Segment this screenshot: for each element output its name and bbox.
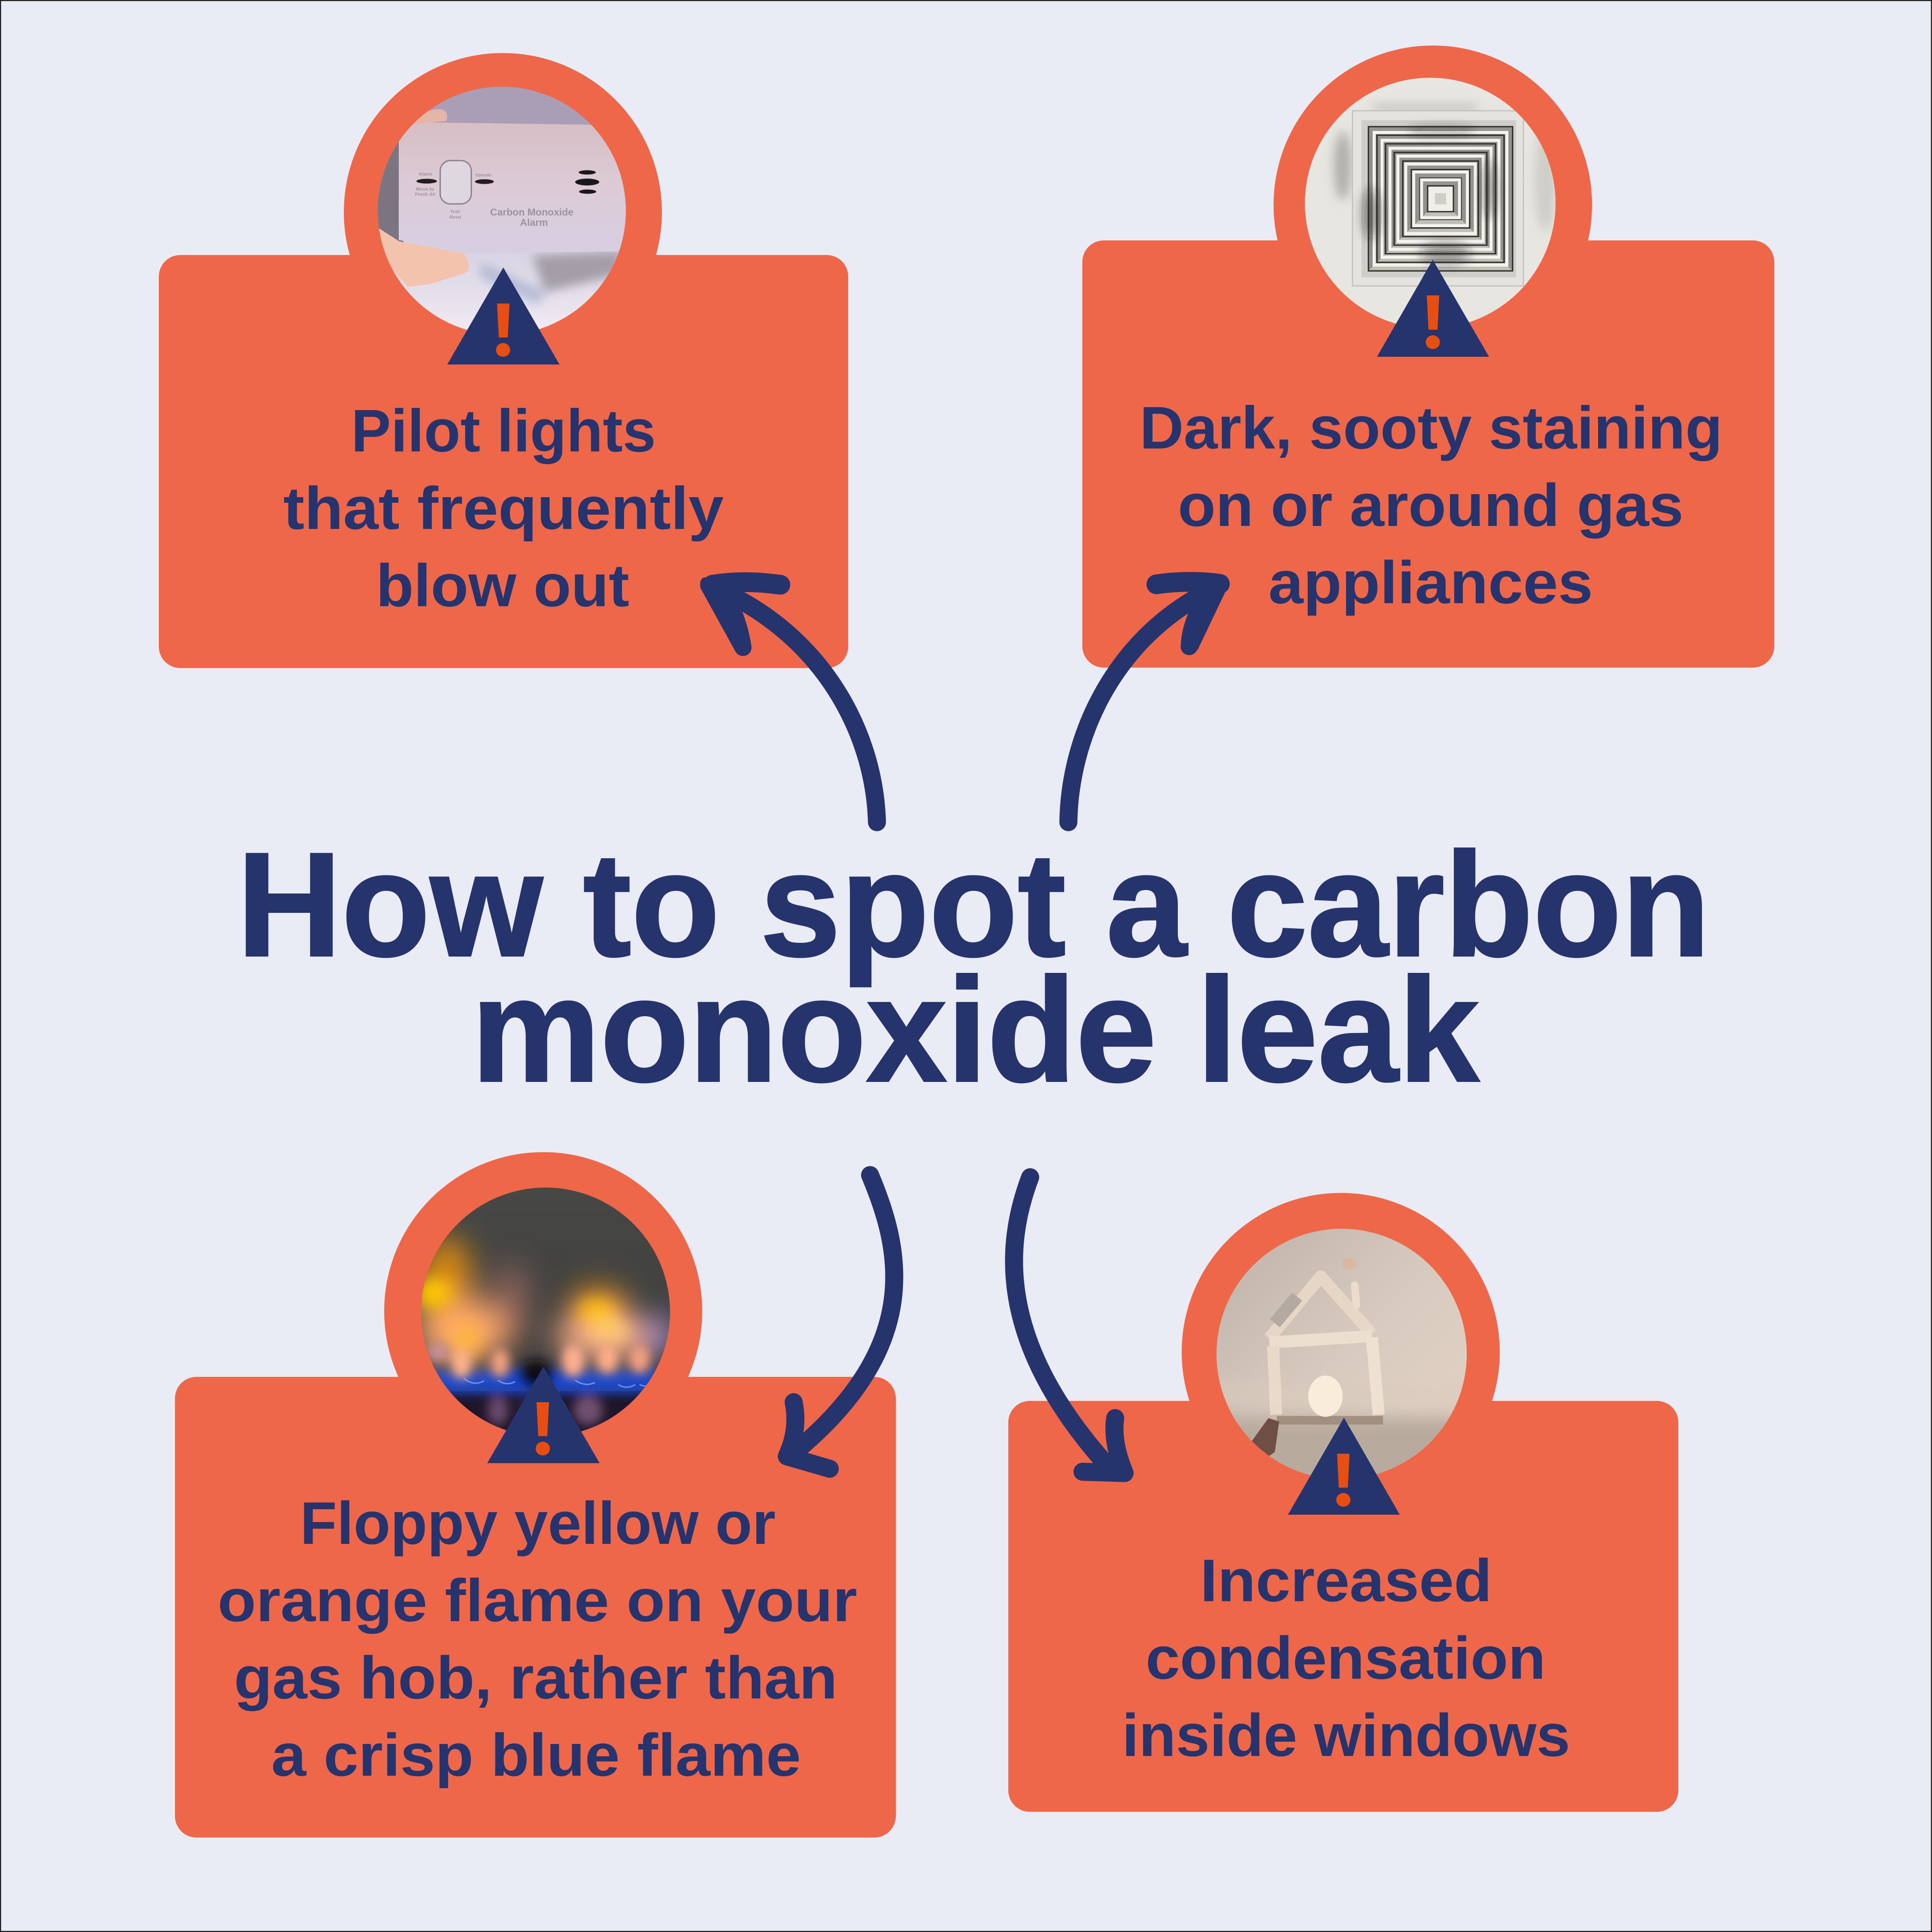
panel: condensation — [1008, 1193, 1678, 1812]
panel: sooty staining — [1083, 46, 1774, 668]
text: sooty staining — [1140, 394, 1723, 616]
photo: carbon monoxide alarm: Operate — [475, 173, 491, 178]
text: floppy flame: a crisp blue flame — [271, 1721, 801, 1789]
text: pilot lights: blow out — [376, 552, 629, 619]
text: floppy flame — [218, 1489, 857, 1789]
arrow: up to sooty staining — [1068, 577, 1229, 822]
title — [237, 822, 1710, 1113]
text: condensation: condensation — [1146, 1624, 1546, 1692]
icon: warning triangle — [1288, 1418, 1400, 1515]
photo: gas hob flame — [416, 1185, 676, 1443]
title: monoxide leak — [471, 948, 1480, 1113]
text: sooty staining: Dark, sooty staining — [1140, 394, 1723, 462]
orange card and ring — [1008, 1193, 1678, 1812]
title: How to spot a carbon — [237, 822, 1710, 988]
photo: house drawn on a fogged window — [1213, 1226, 1474, 1490]
orange card and ring — [159, 53, 848, 668]
photo: carbon monoxide alarm: Reset — [449, 215, 461, 220]
panel: pilot lights — [159, 53, 848, 668]
text: pilot lights: Pilot lights — [351, 397, 656, 465]
text: pilot lights — [283, 397, 724, 619]
icon: warning triangle — [1377, 260, 1489, 357]
photo: carbon monoxide alarm: Test/ — [450, 210, 460, 214]
text: floppy flame: gas hob, rather than — [234, 1644, 837, 1711]
panel: floppy flame — [175, 1152, 896, 1838]
photo: carbon monoxide alarm: Alarm — [520, 217, 548, 228]
text: floppy flame: orange flame on your — [218, 1567, 857, 1634]
orange card and ring — [1083, 46, 1774, 668]
arrow: up to pilot lights — [700, 577, 877, 822]
text: condensation — [1122, 1546, 1570, 1769]
icon: warning triangle — [487, 1367, 600, 1463]
arrow: down to condensation — [1014, 1177, 1125, 1473]
text: sooty staining: appliances — [1268, 549, 1593, 616]
photo: carbon monoxide alarm: Alarm — [419, 172, 432, 177]
orange card and ring — [175, 1152, 896, 1838]
photo: carbon monoxide alarm — [378, 87, 626, 330]
text: condensation: inside windows — [1122, 1701, 1570, 1769]
icon: warning triangle — [447, 267, 560, 365]
arrow: down to floppy flame — [787, 1175, 894, 1469]
text: sooty staining: on or around gas — [1178, 471, 1683, 539]
text: floppy flame: Floppy yellow or — [300, 1489, 776, 1557]
text: condensation: Increased — [1200, 1546, 1492, 1614]
text: pilot lights: that frequently — [283, 474, 724, 542]
photo: carbon monoxide alarm: Move to — [416, 187, 434, 192]
photo: sooty air vent — [1305, 78, 1556, 324]
photo: carbon monoxide alarm: Carbon Monoxide — [490, 207, 573, 218]
photo: carbon monoxide alarm: Fresh Air — [415, 192, 436, 197]
